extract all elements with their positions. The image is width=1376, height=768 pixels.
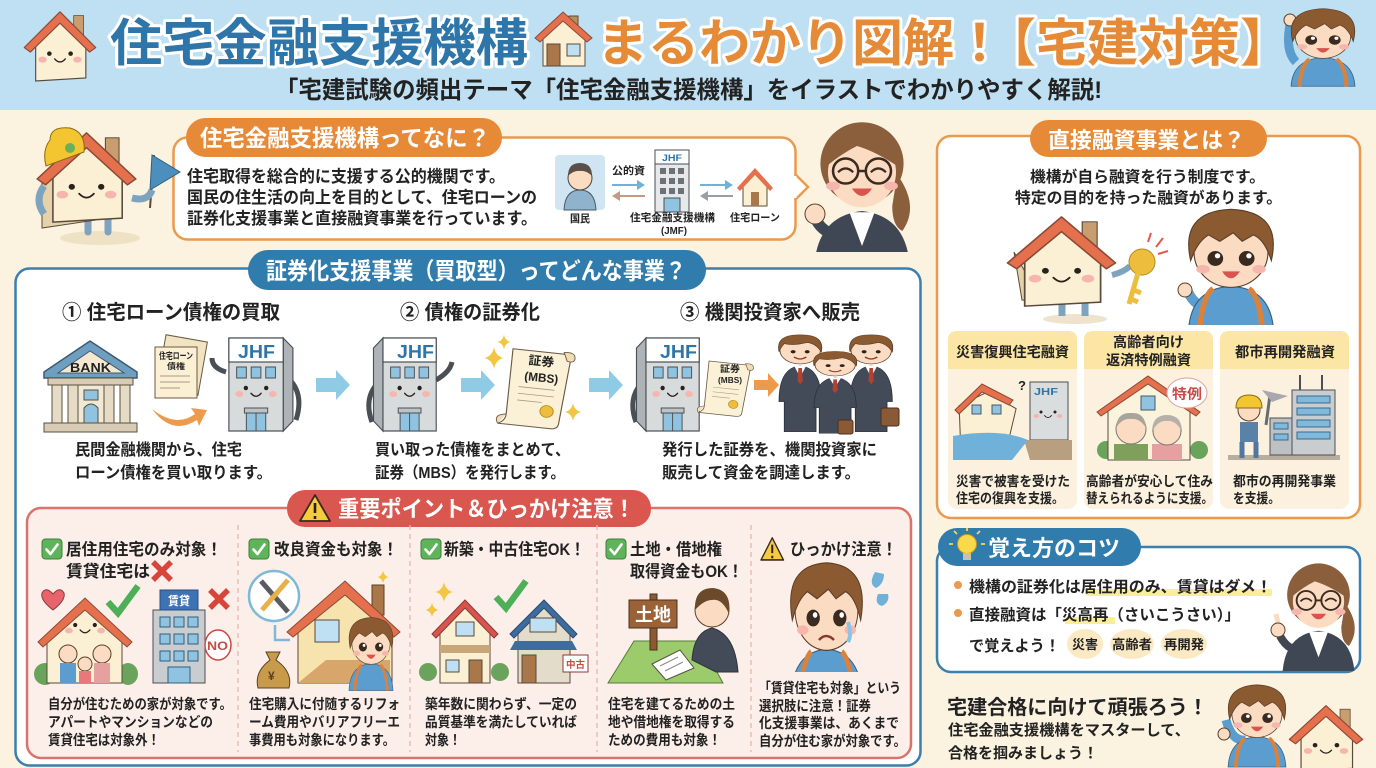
text: column 1: 自分が住むための家が対象です。 <box>48 696 232 712</box>
bullet 1: 機構の証券化は居住用のみ、賃貸はダメ！ <box>969 577 1272 596</box>
diagram: flow between citizens, JHF and loan: (JMF) <box>661 225 687 237</box>
text: column 4: ための費用も対象！ <box>608 732 721 748</box>
character: JHF building 3: JHF <box>660 342 697 362</box>
text: intro: 特定の目的を持った融資があります。 <box>1015 188 1282 207</box>
column: trap warning <box>759 538 906 749</box>
icon: smiling house <box>24 12 96 81</box>
text: column 3: 品質基準を満たしていれば <box>425 714 577 730</box>
heading pill <box>186 118 502 157</box>
card: disaster recovery loan: 住宅の復興を支援。 <box>956 490 1064 506</box>
icon: house mascot with key <box>1007 217 1168 324</box>
panel: securitization support business <box>16 250 920 766</box>
column: land and leasehold: 取得資金もOK！ <box>630 561 743 581</box>
icon: rental building: 賃貸 <box>168 593 190 608</box>
text: column 1: 賃貸住宅は対象外！ <box>48 732 160 748</box>
heading pill <box>287 490 651 527</box>
icon: certificate small: 証券 <box>720 363 740 374</box>
icon: used house: 中古 <box>566 658 585 671</box>
text: column 1: アパートやマンションなどの <box>48 714 213 730</box>
arrow: step 2 to 3 <box>589 370 623 400</box>
icon: damaged house and JHF <box>953 378 1072 460</box>
character: JHF building 2 <box>369 338 452 431</box>
card: senior loan: 返済特例融資 <box>1106 352 1191 368</box>
column: renovation funds: 改良資金も対象！ <box>274 539 398 559</box>
icon: rental building: NO <box>207 639 228 653</box>
icon: heart <box>42 590 64 610</box>
icon: used house <box>510 600 588 683</box>
text: column 1 <box>48 696 232 748</box>
step heading 1: ① 住宅ローン債権の買取 <box>62 301 280 324</box>
icon: boy thumbs up <box>1218 685 1286 767</box>
icon: boy <box>1178 209 1274 331</box>
heading pill <box>1030 120 1267 157</box>
text and chips: 高齢者 <box>1112 637 1152 652</box>
text: column 2: ーム費用やバリアフリーエ <box>249 714 400 730</box>
heading pill <box>938 528 1141 566</box>
icon: new house <box>419 600 509 683</box>
icon: teacher pointing <box>1271 563 1355 674</box>
heading pill <box>248 250 706 290</box>
panel: memory tips <box>937 528 1360 674</box>
text: column 3: 築年数に関わらず、一定の <box>425 696 577 712</box>
icon: money bag: ¥ <box>268 669 275 683</box>
panel: direct loan business <box>937 120 1360 518</box>
text and chips: 再開発 <box>1164 637 1204 652</box>
text: column 2: 住宅購入に付随するリフォ <box>249 696 400 712</box>
panel: important points <box>27 490 911 758</box>
icon: house mascot footer <box>1289 706 1363 768</box>
card: senior loan: 高齢者向け <box>1113 334 1184 350</box>
card: senior loan <box>1084 331 1213 509</box>
diagram: flow between citizens, JHF and loan <box>555 150 780 237</box>
subtitle: 「宅建試験の頻出テーマ「住宅金融支援機構」をイラストでわかりやすく解説! <box>275 77 1102 104</box>
caption: step 2 <box>375 440 570 482</box>
icon: bank <box>44 341 137 432</box>
icon: rental building <box>153 590 231 683</box>
icon: tools in circle <box>249 571 299 640</box>
icon: family house <box>34 598 138 685</box>
text: intro: 機構が自ら融資を行う制度です。 <box>1030 167 1265 186</box>
diagram: flow between citizens, JHF and loan: 国民 <box>570 213 590 225</box>
column: residential only <box>34 539 232 748</box>
text: description: 証券化支援事業と直接融資事業を行っています。 <box>187 208 537 228</box>
heading pill: 重要ポイント＆ひっかけ注意！ <box>338 497 635 522</box>
highlight <box>1065 617 1115 624</box>
highlight <box>1086 589 1272 596</box>
text: column 2: 事費用も対象になります。 <box>249 732 395 748</box>
arrow: to certificate <box>461 370 495 400</box>
icon: house renovated <box>287 581 400 683</box>
caption: step 3: 販売して資金を調達します。 <box>662 463 860 482</box>
card: urban redevelopment loan <box>1220 331 1349 509</box>
text: column 3 <box>425 696 577 748</box>
footer message: 宅建合格に向けて頑張ろう！ <box>947 696 1208 719</box>
footer message: 合格を掴みましょう！ <box>948 744 1098 762</box>
title: main orange: まるわかり図解！ <box>597 15 1005 72</box>
caption: step 3: 発行した証券を、機関投資家に <box>662 440 877 459</box>
arrow: step 1 to 2 <box>316 370 350 400</box>
column: new and used housing: 新築・中古住宅OK！ <box>444 539 585 559</box>
column: residential only: 居住用住宅のみ対象！ <box>66 539 222 559</box>
footer message: 住宅金融支援機構をマスターして、 <box>948 721 1190 739</box>
card: urban redevelopment loan: 都市の再開発事業 <box>1233 473 1336 489</box>
icon: worker and buildings <box>1228 375 1340 460</box>
text: column 4 <box>608 696 735 748</box>
caption: step 1 <box>75 440 272 482</box>
text: description <box>187 166 537 228</box>
heading pill: 直接融資事業とは？ <box>1048 128 1245 153</box>
icon: MBS certificate: 証券 <box>528 352 555 370</box>
icon: land plot with sign and man <box>608 588 738 683</box>
step heading 2: ② 債権の証券化 <box>400 301 540 324</box>
text: column 5: 化支援事業は、あくまで <box>759 715 899 731</box>
caption: step 1: 民間金融機関から、住宅 <box>75 440 242 459</box>
column: land and leasehold: 土地・借地権 <box>630 540 722 559</box>
column: renovation funds <box>249 539 400 748</box>
icon: institutional investors <box>779 335 899 434</box>
text and chips <box>969 629 1207 659</box>
icon: money bag <box>257 652 290 688</box>
header band <box>0 0 1376 110</box>
text: column 5: 「賃貸住宅も対象」という <box>759 680 901 696</box>
character: JHF building 2: JHF <box>397 342 434 362</box>
title: main blue: 住宅金融支援機構 <box>110 15 528 72</box>
diagram: flow between citizens, JHF and loan: 住宅ローン <box>730 211 780 224</box>
text and chips: で覚えよう！ <box>969 636 1060 655</box>
caption: step 2: 買い取った債権をまとめて、 <box>375 440 570 459</box>
text: column 4: 住宅を建てるための土 <box>608 696 735 712</box>
diagram: flow between citizens, JHF and loan: 住宅金融支援機構 <box>630 211 716 224</box>
icon: loan documents: 住宅ローン <box>159 350 193 361</box>
icon: seniors in house: 特例 <box>1172 386 1202 402</box>
heading pill: 住宅金融支援機構ってなに？ <box>200 125 490 151</box>
icon: damaged house and JHF: ? <box>1018 378 1026 393</box>
caption: step 2: 証券（MBS）を発行します。 <box>375 464 565 482</box>
text: column 3: 対象！ <box>425 732 461 748</box>
icon: certificate small: (MBS) <box>718 376 742 385</box>
icon: boy at header <box>1284 9 1355 86</box>
footer message <box>947 696 1208 762</box>
arrow: orange to investors <box>754 373 779 397</box>
step heading 3: ③ 機関投資家へ販売 <box>680 301 860 324</box>
card: senior loan: 高齢者が安心して住み <box>1086 473 1213 489</box>
icon: loan documents: 債権 <box>167 361 185 371</box>
column: trap warning: ひっかけ注意！ <box>790 540 897 559</box>
text: intro <box>1015 167 1282 207</box>
text: column 5 <box>759 680 906 749</box>
text: column 2 <box>249 696 400 748</box>
icon: worried boy <box>790 562 888 672</box>
column: new and used housing <box>419 539 588 748</box>
character: JHF building 1 <box>212 338 299 431</box>
card: urban redevelopment loan: を支援。 <box>1233 490 1280 506</box>
title: exam tag: 【宅建対策】 <box>985 15 1291 72</box>
column: land and leasehold <box>606 539 743 748</box>
character: JHF building 1: JHF <box>238 342 275 362</box>
diagram: flow between citizens, JHF and loan: JHF <box>662 153 682 164</box>
text: description: 住宅取得を総合的に支援する公的機関です。 <box>187 166 505 186</box>
icon: loan documents <box>155 335 207 398</box>
icon: damaged house and JHF: JHF <box>1034 387 1058 398</box>
column: residential only: 賃貸住宅は <box>66 561 150 581</box>
card: disaster recovery loan: 災害で被害を受けた <box>956 473 1070 489</box>
icon: MBS certificate: (MBS) <box>524 369 559 387</box>
caption: step 3 <box>662 440 877 482</box>
card: disaster recovery loan <box>948 331 1077 509</box>
bullet 2: 直接融資は「災高再（さいこうさい）」 <box>969 605 1240 624</box>
character: JHF building 3 <box>633 338 699 431</box>
icon: light bulb <box>949 528 985 560</box>
icon: land plot with sign and man: 土地 <box>635 605 671 625</box>
icon: house mascot with helmet and flag <box>37 128 180 245</box>
heading pill: 証券化支援事業（買取型）ってどんな事業？ <box>266 258 686 284</box>
heading pill: 覚え方のコツ <box>988 536 1120 561</box>
icon: MBS certificate <box>484 335 581 431</box>
icon: bank: BANK <box>70 360 112 375</box>
panel: what is JHF <box>174 118 808 240</box>
icon: small house <box>535 12 592 66</box>
caption: step 1: ローン債権を買い取ります。 <box>75 463 272 482</box>
text and chips: 災害 <box>1072 637 1098 652</box>
text: description: 国民の住生活の向上を目的として、住宅ローンの <box>187 188 537 207</box>
arrow: curved orange <box>152 408 207 426</box>
text: column 5: 選択肢に注意！証券 <box>759 698 871 714</box>
icon: certificate small <box>697 359 754 418</box>
text: column 5: 自分が住む家が対象です。 <box>759 733 906 749</box>
card: disaster recovery loan: 災害復興住宅融資 <box>956 344 1069 360</box>
card: urban redevelopment loan: 都市再開発融資 <box>1235 344 1335 360</box>
text: column 4: 地や借地権を取得する <box>608 714 735 730</box>
icon: teacher woman <box>804 122 910 252</box>
diagram: flow between citizens, JHF and loan: 公的資 <box>612 164 646 177</box>
icon: seniors in house <box>1097 376 1208 460</box>
card: senior loan: 替えられるように支援。 <box>1086 490 1213 506</box>
